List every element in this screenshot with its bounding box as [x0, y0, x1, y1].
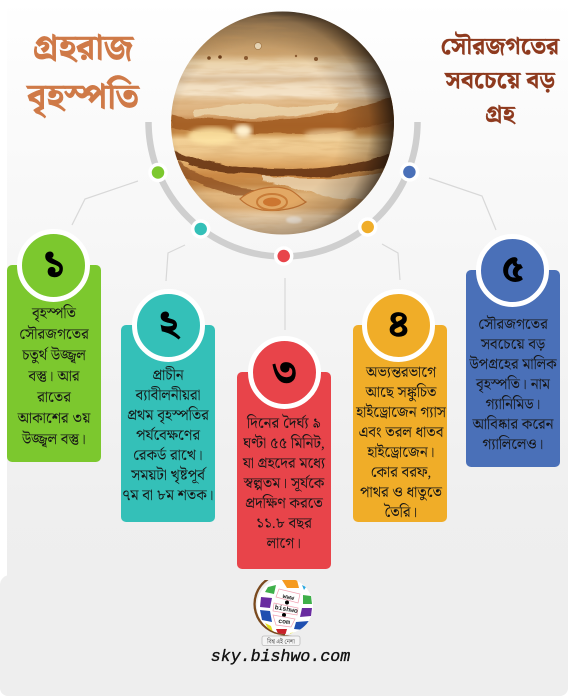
- panel 2 text: ব্যাবীলনীয়রা: [136, 388, 200, 404]
- panel 4 yellow: [353, 325, 447, 522]
- badge 4: ৪: [388, 303, 409, 345]
- orbit arc: [148, 122, 418, 256]
- panel 1 text: [17, 304, 91, 448]
- badge 5: [476, 234, 549, 307]
- badge 3: [248, 336, 321, 409]
- connector 3: [284, 278, 286, 330]
- connector 1: [72, 181, 138, 225]
- panel 2 teal: [121, 325, 215, 522]
- connector 4: [382, 244, 400, 280]
- orbit dot 1 green: [150, 164, 166, 180]
- panel 1 text: আকাশের ৩য়: [18, 411, 90, 427]
- badge 5: ৫: [501, 248, 524, 290]
- panel 2 text: প্রাচীন: [152, 368, 184, 384]
- panel 2 text: পর্যবেক্ষণের: [136, 428, 200, 444]
- logo label com: com: [278, 618, 290, 626]
- badge 2: ২: [158, 303, 179, 345]
- panel 1 green: [7, 265, 101, 462]
- title right: সৌরজগতের: [441, 34, 559, 60]
- footer url: sky.bishwo.com: [211, 647, 350, 666]
- panel 1 text: রাতের: [37, 390, 71, 406]
- panel 1 text: চতুর্থ উজ্জ্বল: [22, 348, 86, 364]
- panel 4 text: কোর বরফ,: [371, 465, 431, 481]
- jupiter planet: [165, 5, 400, 240]
- great red spot: [240, 187, 306, 211]
- connector 5: [429, 178, 496, 230]
- panel 3 text: যা গ্রহদের মধ্যে: [243, 456, 325, 472]
- orbit dot 2 teal: [193, 221, 209, 237]
- panel 4 text: এবং তরল ধাতব: [359, 425, 443, 441]
- panel 4 text: হাইড্রোজেন গ্যাস: [356, 405, 446, 421]
- panel 1 text: বস্তু। আর: [28, 369, 80, 385]
- panel 2 text: রেকর্ড রাখে।: [133, 448, 203, 464]
- connector 2: [166, 245, 185, 281]
- panel 4 text: আছে সঙ্কুচিত: [366, 385, 436, 401]
- panel 4 text: পাথর ও ধাতুতে: [360, 485, 442, 501]
- orbit dot 3 red: [276, 248, 292, 264]
- panel 3 red: [237, 372, 331, 569]
- panel 3 text: লাগে।: [267, 536, 301, 552]
- panel 5 text: সবচেয়ে বড়: [481, 337, 545, 353]
- logo label bishwo: bishwo: [274, 604, 298, 615]
- badge 4: [362, 289, 435, 362]
- panel 5 blue: [466, 270, 560, 467]
- panel 1 text: সৌরজগতের: [19, 327, 89, 343]
- orbit dot 5 blue: [401, 164, 417, 180]
- panel 5 text: উপগ্রহের মালিক: [469, 357, 557, 373]
- panel 2 text: ৭ম বা ৮ম শতক।: [122, 488, 214, 504]
- title left: [26, 28, 140, 118]
- panel 1 text: বৃহস্পতি: [32, 306, 76, 322]
- panel 4 text: অভ্যন্তরভাগে: [366, 365, 436, 381]
- panel 4 text: [356, 365, 446, 521]
- panel 5 text: [469, 315, 557, 453]
- badge 3: ৩: [272, 350, 297, 392]
- panel 5 text: গ্যালিলেও।: [482, 437, 544, 453]
- orbit dot 4 yellow: [360, 219, 376, 235]
- panel 2 text: সময়টা খৃষ্টপূর্ব: [131, 468, 205, 484]
- panel 4 text: হাইড্রোজেন।: [367, 445, 435, 461]
- title right: সবচেয়ে বড়: [445, 68, 555, 94]
- title right: গ্রহ: [485, 102, 515, 128]
- badge 1: ১: [43, 243, 64, 285]
- title left: গ্রহরাজ: [33, 28, 133, 67]
- panel 3 text: স্বল্পতম। সূর্যকে: [244, 476, 324, 492]
- panel 5 text: গ্যানিমিড।: [485, 397, 541, 413]
- panel 2 text: প্রথম বৃহস্পতির: [127, 408, 209, 424]
- panel 2 text: [122, 366, 214, 504]
- logo label www: www: [282, 593, 295, 602]
- logo globe: [255, 578, 313, 646]
- panel 3 text: [242, 414, 326, 552]
- panel 5 text: বৃহস্পতি। নাম: [476, 377, 550, 393]
- logo globe: বিশ্ব এই নেশা: [266, 636, 295, 646]
- panel 3 text: দিনের দৈর্ঘ্য ৯: [247, 416, 321, 432]
- badge 1: [17, 229, 90, 302]
- panel 3 text: ১১.৮ বছর: [256, 516, 312, 532]
- panel 1 text: উজ্জ্বল বস্তু।: [22, 432, 86, 448]
- panel 3 text: ঘণ্টা ৫৫ মিনিট,: [243, 436, 325, 452]
- panel 3 text: প্রদক্ষিণ করতে: [245, 496, 323, 512]
- badge 2: [132, 289, 205, 362]
- title left: বৃহস্পতি: [27, 77, 139, 116]
- panel 4 text: তৈরি।: [384, 505, 418, 521]
- panel 5 text: সৌরজগতের: [478, 317, 548, 333]
- title right: [441, 31, 560, 128]
- panel 5 text: আবিষ্কার করেন: [473, 417, 553, 433]
